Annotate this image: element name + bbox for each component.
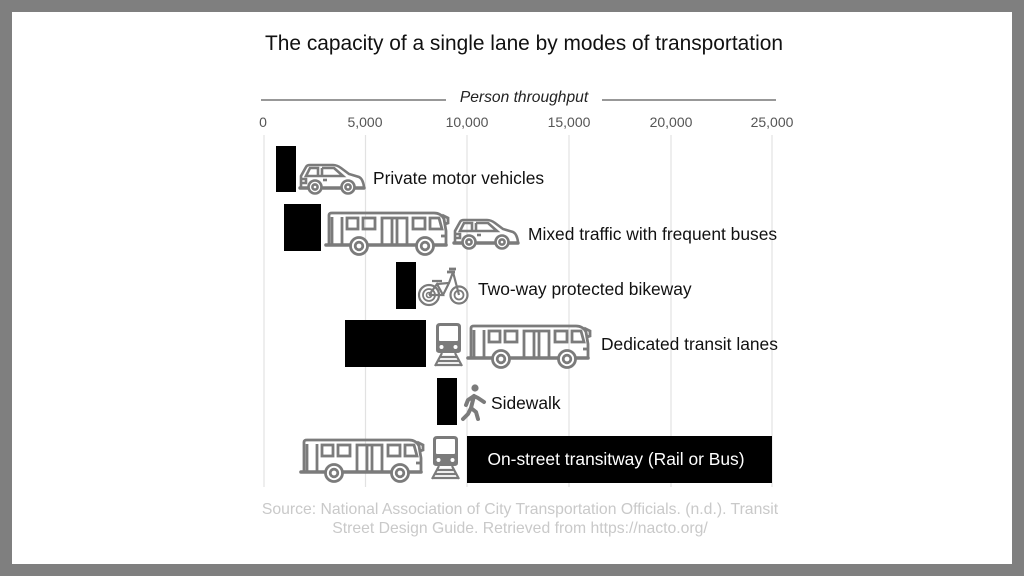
bar: on-street transitway xyxy=(467,436,772,483)
icon: bicycle xyxy=(419,269,468,305)
bar: dedicated transit xyxy=(345,320,426,367)
icon: bus xyxy=(301,440,423,482)
source note: Street Design Guide. Retrieved from https://nacto.org/ xyxy=(332,520,708,537)
icon: train xyxy=(435,323,462,366)
axis tick labels: 15,000 xyxy=(548,114,591,130)
label: private motor vehicles: Private motor vehicles xyxy=(373,168,544,188)
bar: bikeway xyxy=(396,262,416,309)
label: mixed traffic: Mixed traffic with frequent buses xyxy=(528,224,777,244)
row: private motor vehicles xyxy=(276,146,544,194)
label: dedicated transit: Dedicated transit lanes xyxy=(601,334,778,354)
axis tick labels: 10,000 xyxy=(446,114,489,130)
bar: mixed traffic xyxy=(284,204,321,251)
icon: car xyxy=(300,165,364,194)
row: mixed traffic with frequent buses xyxy=(284,204,777,254)
source note xyxy=(262,501,779,537)
bar: sidewalk xyxy=(437,378,457,425)
row: two-way protected bikeway xyxy=(396,262,692,309)
axis tick labels: 0 xyxy=(259,114,267,130)
axis tick labels: 5,000 xyxy=(347,114,383,130)
icon: train xyxy=(432,436,459,479)
row: sidewalk xyxy=(437,378,561,425)
axis tick labels: 25,000 xyxy=(751,114,794,130)
row: dedicated transit lanes xyxy=(345,320,778,368)
axis tick labels: 20,000 xyxy=(650,114,693,130)
label: on-street transitway: On-street transitway (Rail or Bus) xyxy=(487,449,745,469)
icon: car xyxy=(454,220,518,248)
icon: bus xyxy=(326,213,448,254)
title: The capacity of a single lane by modes of transportation xyxy=(265,32,783,55)
label: sidewalk: Sidewalk xyxy=(491,393,561,413)
row: on-street transitway xyxy=(301,436,772,483)
bar: private motor vehicles xyxy=(276,146,296,192)
icon: pedestrian xyxy=(463,384,484,419)
label: bikeway: Two-way protected bikeway xyxy=(478,279,692,299)
axis title: person throughput: Person throughput xyxy=(460,89,589,106)
source note: Source: National Association of City Transportation Officials. (n.d.). Transit xyxy=(262,501,779,518)
axis tick labels xyxy=(259,114,794,130)
icon: bus xyxy=(468,326,590,368)
